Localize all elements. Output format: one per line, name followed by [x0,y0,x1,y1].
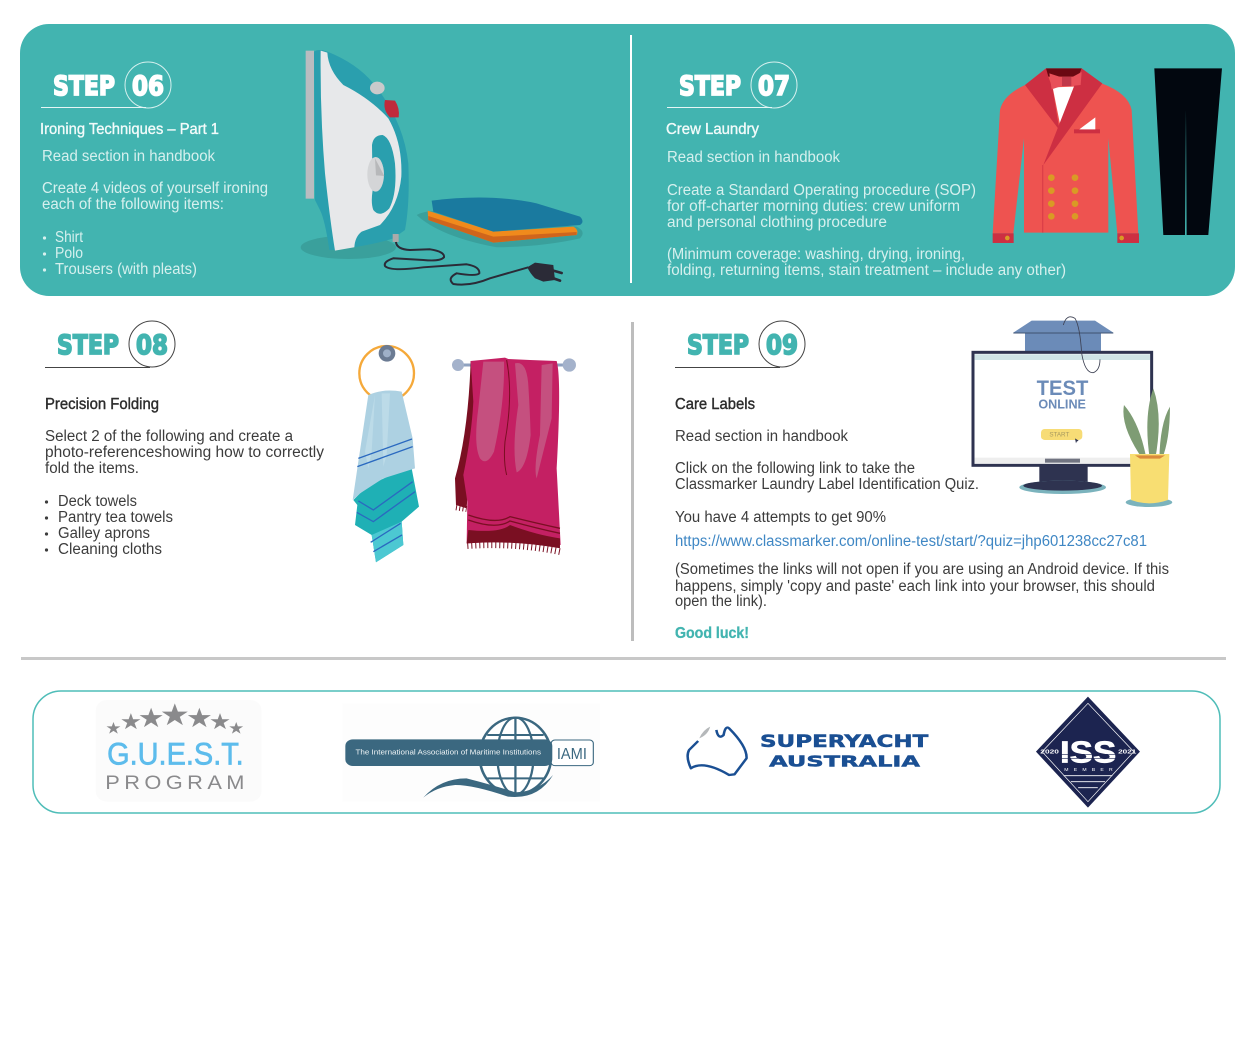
heading: step 07: 07 [758,71,790,102]
illustration: iron and folded clothes [301,50,583,285]
text block: step 06 instructions: Polo [55,245,83,262]
text block: step 06 instructions: Trousers (with pleats) [55,261,197,278]
text block: step 09 instructions: https://www.classmarker.com/online-test/start/?quiz=jhp601238cc27c81 [675,533,1147,550]
text block: step 08 instructions: fold the items. [45,460,139,477]
heading: step 06 [41,62,171,108]
logo: ISS member badge: 2021 [1118,750,1137,756]
text block: step 07 instructions [666,121,1066,279]
text block: step 09 instructions [675,396,1169,642]
logo: Superyacht Australia: AUSTRALIA [769,752,921,770]
logo: G.U.E.S.T. program: ★ [186,703,213,734]
text block: step 09 instructions: Classmarker Laundry Label Identification Quiz. [675,476,979,493]
heading: step 09: 09 [766,330,798,361]
text block: step 06 instructions: each of the following items: [42,196,224,213]
illustration: red uniform jacket [993,68,1139,243]
text block: step 07 instructions: for off-charter morning duties: crew uniform [667,198,960,215]
panel: partner logos [33,691,1220,813]
text block: step 08 instructions: photo-referenceshowing how to correctly [45,444,324,461]
text block: step 08 instructions [45,396,324,558]
logo: IAMI: The International Association of Maritime Institutions [355,748,541,756]
logo: Superyacht Australia [688,727,928,775]
text block: step 06 instructions [40,121,268,278]
text block: step 09 instructions: open the link). [675,593,767,610]
heading: step 09: STEP [687,330,749,361]
horizontal divider [21,657,1226,660]
heading: step 06: STEP [53,71,115,102]
logo: G.U.E.S.T. program: ★ [138,703,165,734]
text block: step 09 instructions: Read section in handbook [675,428,848,445]
logo: IAMI: IAMI [557,746,587,763]
text block: step 09 instructions: (Sometimes the links will not open if you are using an Android device. If this [675,561,1169,578]
heading: step 09 [675,321,805,368]
text block: step 08 instructions: Cleaning cloths [58,541,162,558]
logo: IAMI [342,703,600,802]
heading: step 07: STEP [679,71,741,102]
text block: step 08 instructions: Select 2 of the following and create a [45,428,293,445]
text block: step 06 instructions: Read section in handbook [42,148,215,165]
logo: Superyacht Australia: SUPERYACHT [760,733,928,752]
logo: G.U.E.S.T. program: ★ [105,720,122,738]
text block: step 06 instructions: Ironing Techniques – Part 1 [40,121,219,138]
text block: step 08 instructions: Galley aprons [58,525,150,542]
heading: step 06: 06 [132,71,164,102]
text block: step 07 instructions: and personal clothing procedure [667,214,887,231]
heading: step 08: 08 [136,330,168,361]
text block: step 07 instructions: (Minimum coverage: washing, drying, ironing, [667,246,965,263]
text block: step 07 instructions: Create a Standard Operating procedure (SOP) [667,182,976,199]
logo: G.U.E.S.T. program: ★ [228,720,244,738]
text block: step 06 instructions: Create 4 videos of yourself ironing [42,180,268,197]
text block: step 08 instructions: Pantry tea towels [58,509,173,526]
text block: step 07 instructions: Crew Laundry [666,121,759,138]
vertical divider [631,322,634,641]
logo: G.U.E.S.T. program: ★ [209,708,231,735]
logo: ISS member badge [1036,697,1140,808]
text block: step 09 instructions: Click on the following link to take the [675,460,915,477]
logo: ISS member badge: MEMBER [1064,767,1113,773]
logo: G.U.E.S.T. program: G.U.E.S.T. [107,737,244,772]
panel: steps 06 and 07 [20,24,1235,296]
logo: G.U.E.S.T. program: ★ [120,708,142,735]
text block: step 07 instructions: folding, returning items, stain treatment – include any other) [667,262,1066,279]
text block: step 09 instructions: Good luck! [675,625,749,642]
heading: step 08: STEP [57,330,119,361]
panel: step 08 [45,321,576,562]
panel: step 09 [675,317,1172,642]
illustration: pink towel on rail [452,358,576,552]
heading: step 08 [45,321,175,368]
text block: step 07 instructions: Read section in handbook [667,149,840,166]
illustration: online test monitor with plant [973,317,1172,507]
text block: step 09 instructions: Care Labels [675,396,755,413]
logo: G.U.E.S.T. program: ★ [160,697,190,732]
text block: step 08 instructions: Deck towels [58,493,137,510]
logo: G.U.E.S.T. program [96,697,261,802]
illustration: online test monitor with plant: ONLINE [1038,398,1086,412]
illustration: black uniform trousers [1154,68,1222,235]
logo: G.U.E.S.T. program: PROGRAM [105,772,244,794]
heading: step 07 [667,62,797,108]
text block: step 06 instructions: Shirt [55,229,84,246]
illustration: online test monitor with plant: START [1049,431,1069,438]
logo: ISS member badge: 2020 [1040,750,1060,756]
illustration: towel on ring [353,345,419,562]
text block: step 09 instructions: happens, simply 'copy and paste' each link into your browser, this should [675,578,1155,595]
illustration: online test monitor with plant: TEST [1037,376,1088,400]
text block: step 08 instructions: Precision Folding [45,396,159,413]
text block: step 09 instructions: You have 4 attempts to get 90% [675,509,886,526]
logo: ISS member badge: ISS [1060,735,1116,769]
